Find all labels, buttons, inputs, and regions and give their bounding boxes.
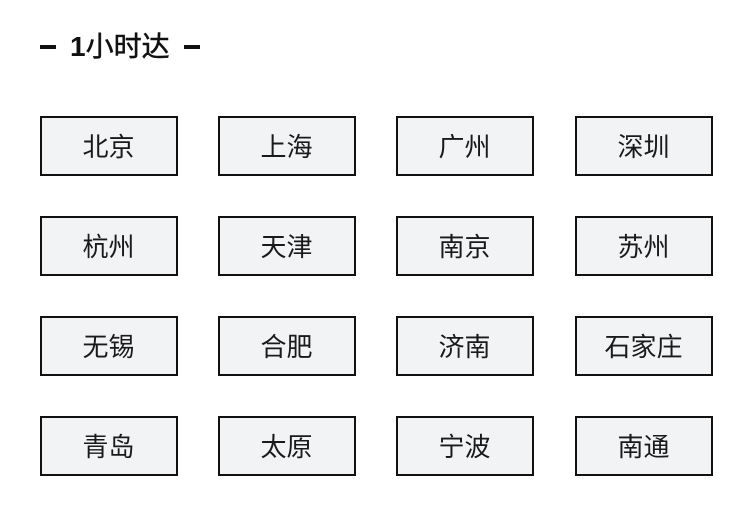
heading	[40, 31, 200, 62]
city: 青岛	[40, 416, 178, 476]
city: 太原: 太原	[260, 432, 312, 462]
city: 广州	[396, 116, 534, 176]
city: 济南: 济南	[438, 332, 490, 362]
heading dash left	[40, 45, 56, 49]
city: 无锡	[40, 316, 178, 376]
city: 上海: 上海	[260, 132, 312, 162]
city: 北京	[40, 116, 178, 176]
city: 合肥	[218, 316, 356, 376]
city: 杭州: 杭州	[82, 232, 134, 262]
city: 石家庄: 石家庄	[604, 332, 682, 362]
city: 天津: 天津	[260, 232, 312, 262]
heading text: 1小时达	[70, 31, 170, 62]
city: 苏州	[575, 216, 713, 276]
city: 深圳	[575, 116, 713, 176]
city: 南通: 南通	[617, 432, 670, 462]
city: 广州: 广州	[438, 132, 490, 162]
city: 南京	[396, 216, 534, 276]
city: 南通	[575, 416, 713, 476]
city: 太原	[218, 416, 356, 476]
city: 苏州: 苏州	[617, 232, 670, 262]
city: 石家庄	[575, 316, 713, 376]
city grid	[40, 116, 713, 476]
city: 南京: 南京	[438, 232, 490, 262]
city: 宁波	[396, 416, 534, 476]
city: 杭州	[40, 216, 178, 276]
city: 上海	[218, 116, 356, 176]
city: 深圳: 深圳	[617, 132, 670, 162]
city: 宁波: 宁波	[438, 432, 490, 462]
city: 北京: 北京	[82, 132, 134, 162]
city: 天津	[218, 216, 356, 276]
city: 济南	[396, 316, 534, 376]
city: 合肥: 合肥	[260, 332, 312, 362]
heading dash right	[184, 45, 200, 49]
city: 青岛: 青岛	[82, 432, 134, 462]
city: 无锡: 无锡	[82, 332, 134, 362]
